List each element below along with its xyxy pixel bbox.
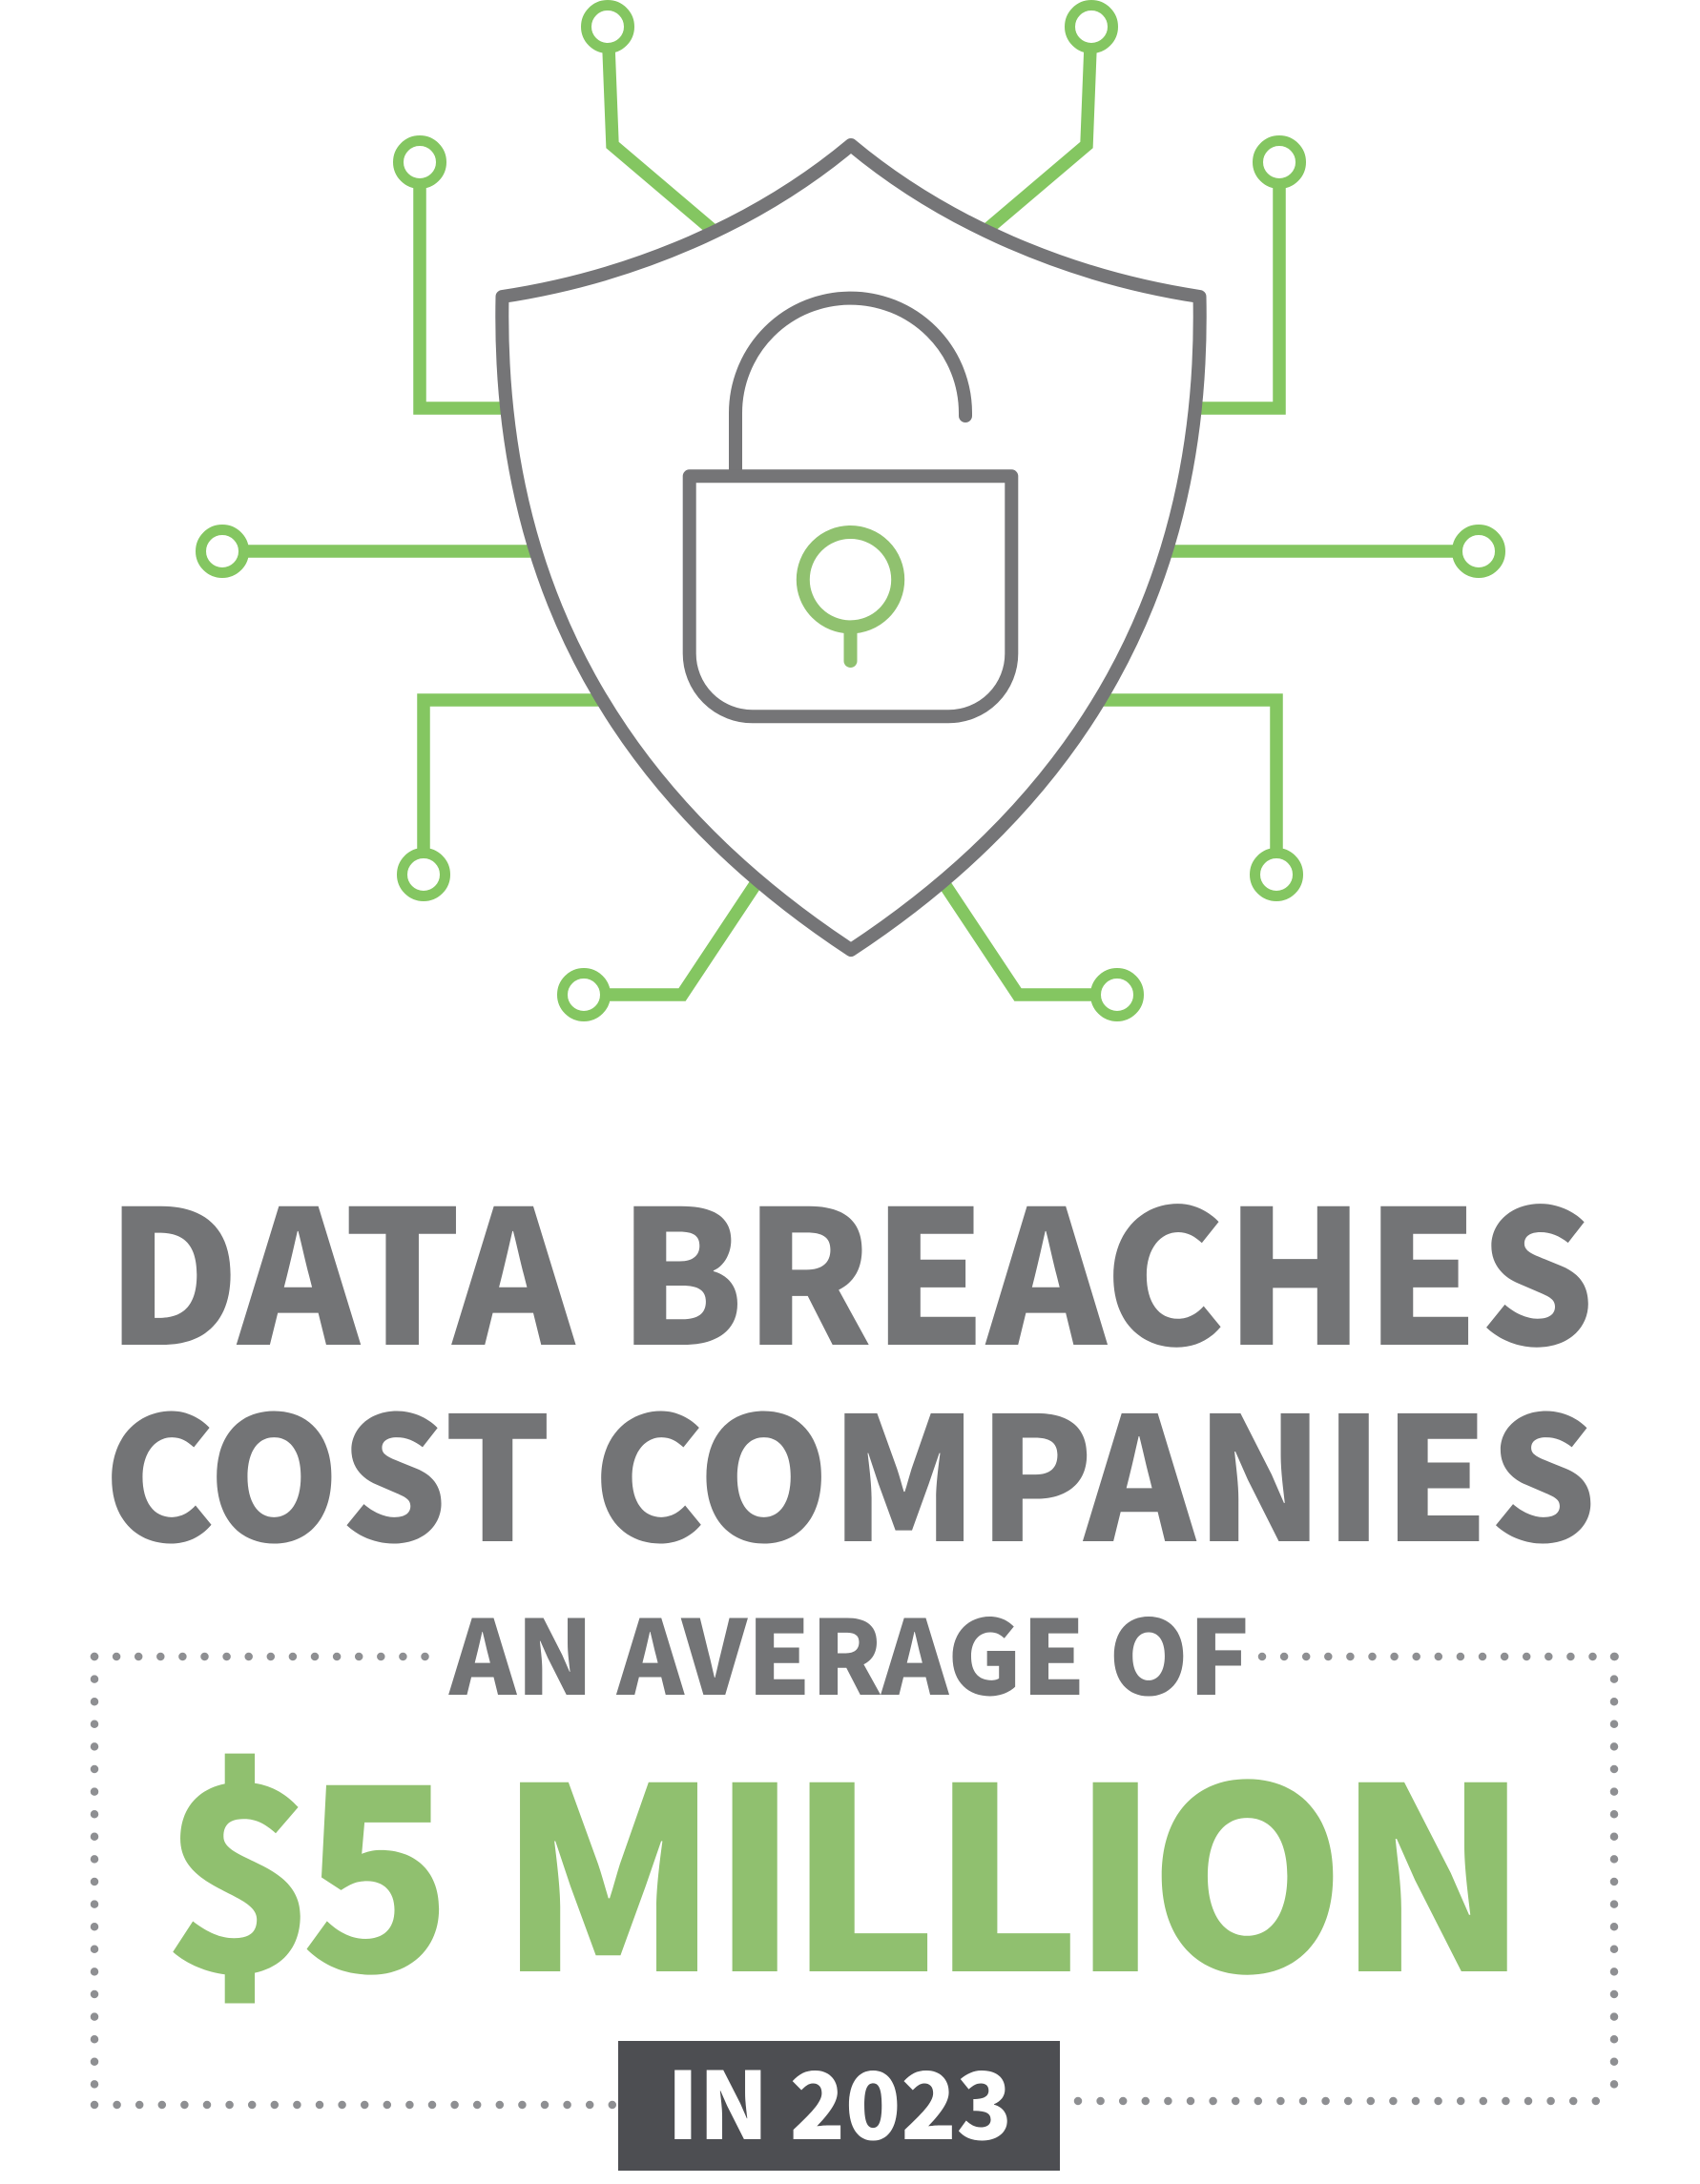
dollar amount: 5	[301, 1682, 453, 2044]
trace: upper left	[399, 141, 510, 408]
padlock shackle	[736, 299, 965, 476]
subheading: AN AVERAGE OF	[448, 1576, 1250, 1725]
million: MILLION	[498, 1678, 1529, 2045]
headline line 1	[106, 1130, 1595, 1399]
icon: shield	[502, 145, 1200, 950]
trace: top right	[979, 6, 1112, 237]
year badge	[618, 2031, 1060, 2171]
padlock body	[690, 476, 1011, 716]
big figure	[162, 1676, 1529, 2046]
trace: upper right	[1192, 141, 1301, 408]
trace: bottom right	[939, 876, 1139, 1017]
dollar amount: $	[162, 1676, 318, 2046]
trace: top left	[586, 6, 720, 237]
headline line 2	[103, 1342, 1597, 1591]
headline line 1: DATA	[106, 1130, 576, 1399]
trace: lower left	[403, 700, 611, 896]
headline line 2: COMPANIES	[592, 1342, 1597, 1591]
icon: open padlock	[690, 299, 1011, 716]
trace: middle right	[1164, 530, 1500, 572]
trace: bottom left	[563, 876, 761, 1017]
icon: circuit traces	[200, 6, 1500, 1017]
headline line 2: COST	[103, 1342, 551, 1591]
dotted frame	[94, 1657, 1616, 2105]
trace: middle left	[200, 530, 539, 572]
keyhole	[803, 532, 898, 661]
trace: lower right	[1092, 700, 1297, 896]
headline line 1: BREACHES	[618, 1130, 1595, 1399]
badge label: IN 2023	[667, 2031, 1012, 2166]
badge background	[618, 2041, 1060, 2171]
